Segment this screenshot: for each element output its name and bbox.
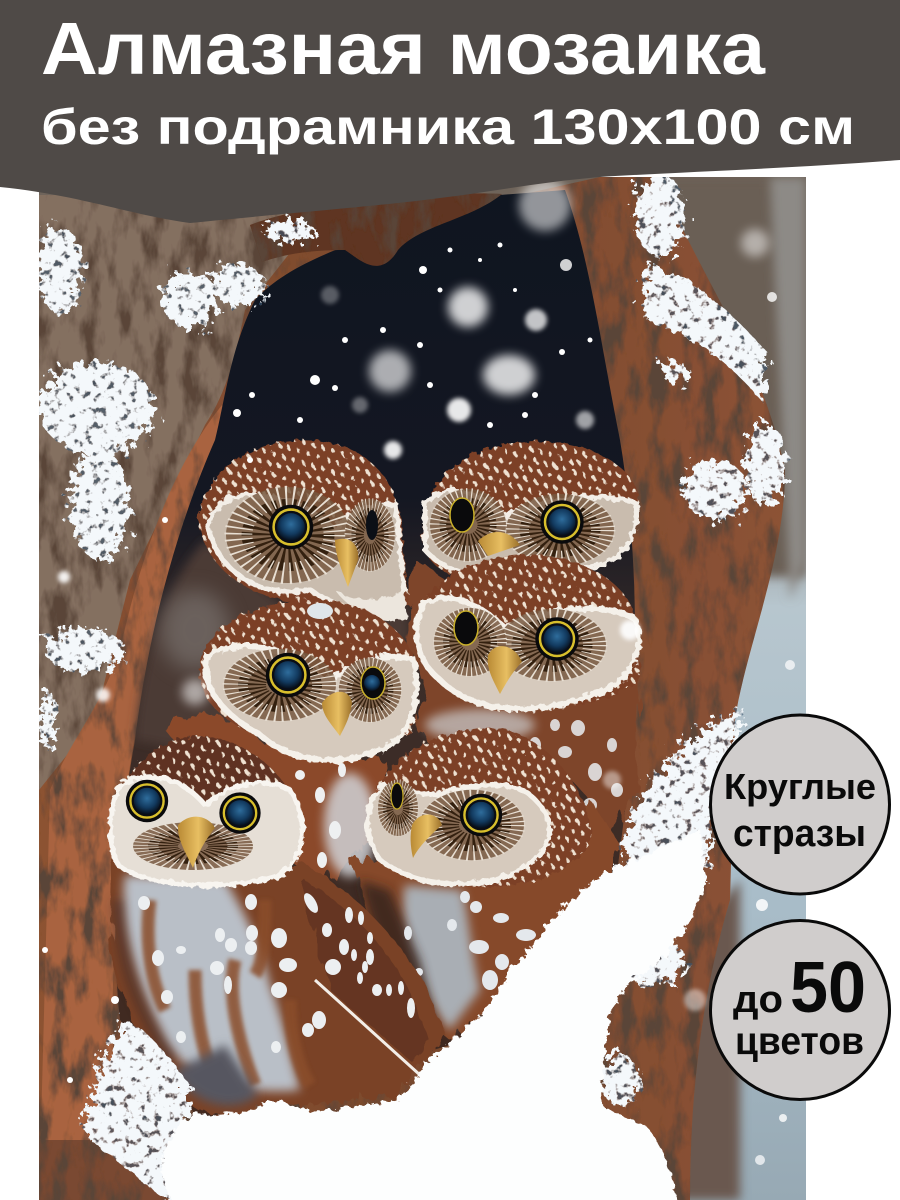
- badge: round rhinestones: стразы: [733, 813, 866, 855]
- owl: bottom left: [110, 736, 305, 885]
- foreground snowflakes: [42, 229, 795, 1165]
- feathers around eyes: [133, 822, 253, 870]
- owl: top right: [422, 441, 638, 577]
- snowflakes behind owls: [233, 179, 594, 459]
- owl bodies: [110, 540, 640, 1117]
- owl: middle left: [200, 600, 416, 760]
- overhanging bark branch: [250, 193, 502, 266]
- badge: round rhinestones: Круглые: [724, 766, 876, 807]
- badge: up to 50 colours: 50: [790, 948, 866, 1028]
- tree trunk bark: [39, 177, 785, 1200]
- eye: [450, 498, 474, 532]
- eye: [535, 617, 579, 661]
- feathers around eyes: [430, 489, 614, 566]
- badge: up to 50 colours: [710, 920, 890, 1100]
- beak: [178, 817, 215, 868]
- owl body: right middle: [405, 560, 640, 835]
- badge: up to 50 colours: цветов: [735, 1020, 864, 1063]
- snow mound: [163, 830, 705, 1200]
- owl body: bottom left: [110, 860, 445, 1117]
- beak: [322, 692, 352, 736]
- owl: top left: [198, 440, 408, 621]
- owl body: bottom middle: [350, 800, 625, 1040]
- eye: [126, 780, 168, 822]
- feathers around eyes: [378, 780, 524, 860]
- eye: [454, 611, 478, 645]
- eye: [460, 794, 502, 836]
- beak: [335, 539, 358, 587]
- title: Алмазная мозаика: [41, 7, 766, 90]
- owl body: middle left: [165, 715, 385, 885]
- eye: [361, 667, 385, 699]
- eye: [219, 792, 261, 834]
- header banner: [0, 0, 900, 223]
- feathers around eyes: [226, 487, 395, 583]
- badge: round rhinestones: [710, 715, 890, 894]
- beak: [488, 646, 522, 694]
- beak: [411, 814, 442, 858]
- owl body: top left: [135, 540, 410, 760]
- beak: [478, 532, 520, 556]
- eye: [391, 783, 403, 809]
- dark hollow: [116, 190, 635, 1120]
- subtitle: без подрамника 130х100 см: [41, 99, 855, 155]
- owl: right middle: [417, 555, 640, 712]
- eye: [540, 500, 584, 544]
- eye: [269, 505, 313, 549]
- feathers around eyes: [434, 608, 606, 681]
- background: blurred forest strip: [39, 177, 806, 1200]
- snow patches on trunk: [38, 173, 785, 1200]
- badge: up to 50 colours: до: [733, 979, 783, 1021]
- eye: [266, 653, 310, 697]
- owl: bottom middle: [367, 728, 592, 887]
- photo: owls in a snowy tree hollow: [38, 173, 806, 1200]
- feathers around eyes: [224, 649, 401, 722]
